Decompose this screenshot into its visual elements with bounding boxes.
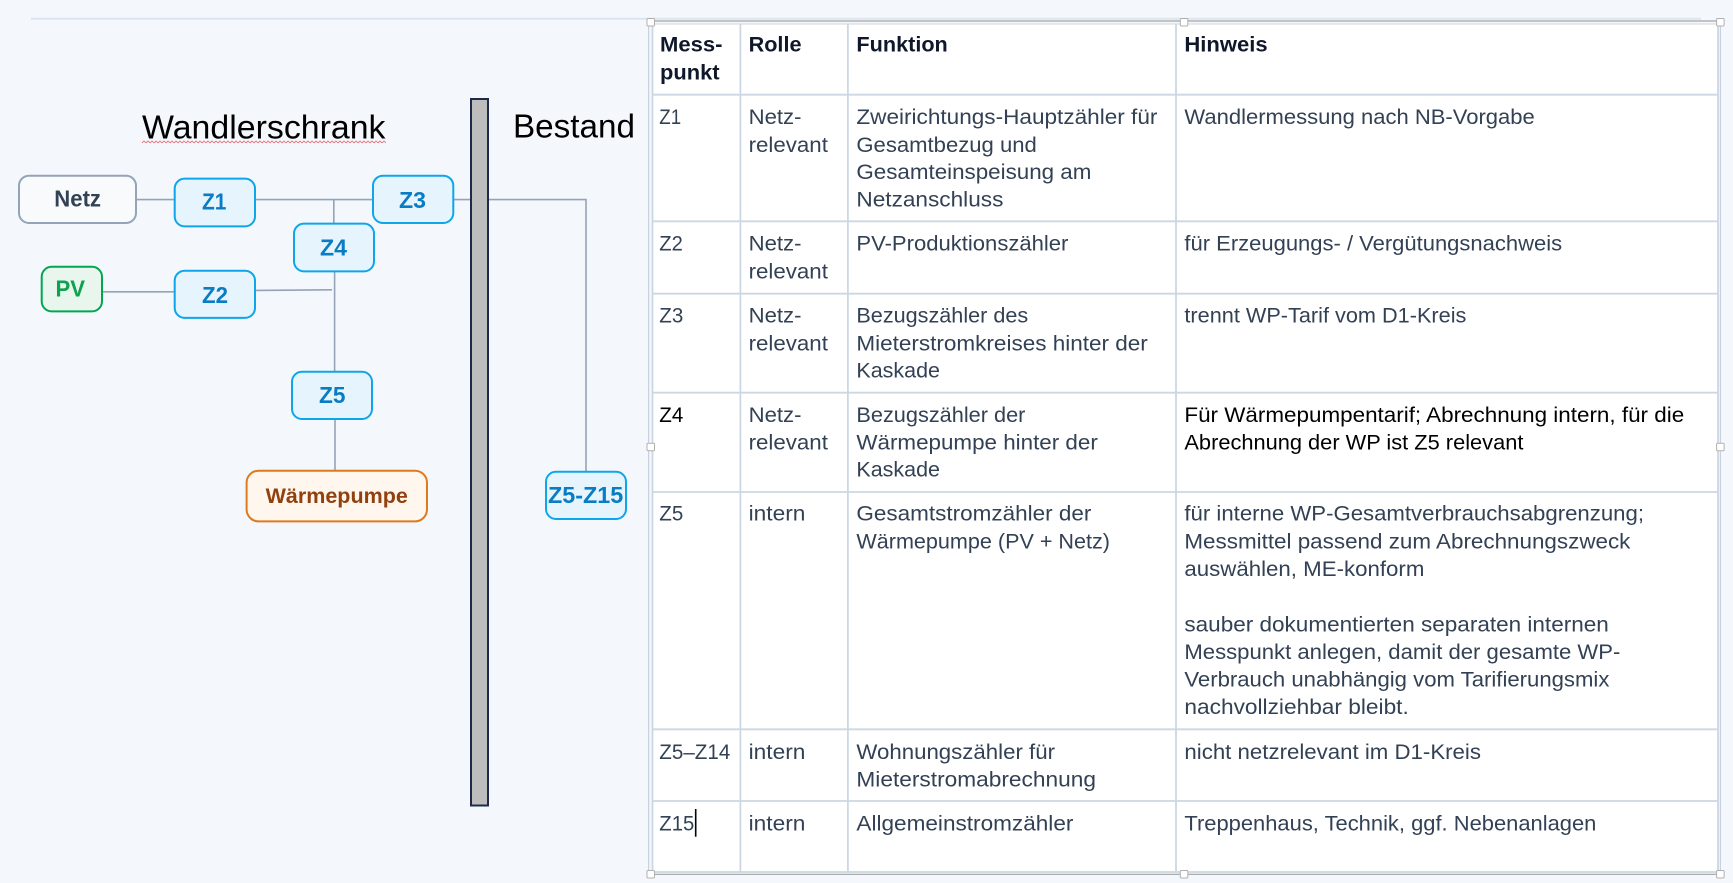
row: Z4: Abrechnung der WP ist Z5 relevant xyxy=(1184,430,1523,454)
row: Z15: Z15 xyxy=(659,812,694,836)
meter: Z1 xyxy=(175,179,255,226)
heading: Bestand: Bestand xyxy=(513,108,635,144)
node: PV xyxy=(42,267,102,311)
row: Z1: Z1 xyxy=(659,105,681,129)
header: Messpunkt: Mess- xyxy=(660,33,722,57)
row: Z15 xyxy=(659,809,1596,837)
meter: Z1: Z1 xyxy=(202,189,226,215)
row: Z3: relevant xyxy=(749,332,828,356)
row: Z2: für Erzeugungs- / Vergütungsnachweis xyxy=(1184,232,1562,256)
row: Z1: Gesamtbezug und xyxy=(856,133,1037,157)
row: Z5: Gesamtstromzähler der xyxy=(856,502,1091,526)
meter: Z3 xyxy=(373,176,453,223)
row: Z5: Messpunkt anlegen, damit der gesamte WP- xyxy=(1184,640,1620,664)
row: Z4 xyxy=(659,403,1684,482)
row: Z5: intern xyxy=(749,502,805,526)
row: Z5: Messmittel passend zum Abrechnungszweck xyxy=(1184,530,1631,554)
meter: Z4 xyxy=(294,224,374,271)
row: Z3: Mieterstromkreises hinter der xyxy=(856,332,1148,356)
header: Messpunkt xyxy=(660,33,722,85)
heading: Wandlerschrank: Wandlerschrank xyxy=(142,109,386,146)
row: Z5–Z14: nicht netzrelevant im D1-Kreis xyxy=(1184,740,1481,764)
row: Z15: Treppenhaus, Technik, ggf. Nebenanlagen xyxy=(1184,812,1596,836)
row: Z5 xyxy=(659,502,1644,719)
header: Messpunkt: punkt xyxy=(660,61,720,85)
row: Z5: nachvollziehbar bleibt. xyxy=(1184,695,1409,719)
meter: Z2 xyxy=(175,271,255,318)
meter: Z5-Z15 xyxy=(546,472,626,519)
node: Netz: Netz xyxy=(54,186,101,212)
row: Z15: intern xyxy=(749,812,805,836)
row: Z4: Netz- xyxy=(749,403,802,427)
row: Z15: Allgemeinstromzähler xyxy=(856,812,1073,836)
row: Z5: auswählen, ME-konform xyxy=(1184,557,1424,581)
row: Z1: Gesamteinspeisung am xyxy=(856,160,1091,184)
row: Z5–Z14: intern xyxy=(749,740,805,764)
row: Z2: PV-Produktionszähler xyxy=(856,232,1068,256)
row: Z3: trennt WP-Tarif vom D1-Kreis xyxy=(1184,304,1466,328)
row: Z5–Z14: Wohnungszähler für xyxy=(856,740,1055,764)
meter: Z5 xyxy=(292,372,372,419)
row: Z1: Netzanschluss xyxy=(856,188,1003,212)
header: Hinweis: Hinweis xyxy=(1184,33,1268,57)
row: Z5: Z5 xyxy=(659,502,683,526)
row: Z4: Für Wärmepumpentarif; Abrechnung intern, für die xyxy=(1184,403,1684,427)
row: Z4: Bezugszähler der xyxy=(856,403,1025,427)
row: Z5–Z14 xyxy=(659,740,1481,792)
node: Netz xyxy=(19,176,136,223)
table grid xyxy=(652,24,1718,872)
node: Wärmepumpe: Wärmepumpe xyxy=(266,485,408,508)
row: Z3 xyxy=(659,304,1466,383)
node: PV: PV xyxy=(56,276,86,302)
header: Rolle: Rolle xyxy=(749,33,802,57)
row: Z3: Z3 xyxy=(659,304,683,328)
row: Z3: Kaskade xyxy=(856,359,940,383)
row: Z1: relevant xyxy=(749,133,828,157)
row: Z3: Netz- xyxy=(749,304,802,328)
meter: Z2: Z2 xyxy=(202,282,228,308)
row: Z4: relevant xyxy=(749,430,828,454)
row: Z5–Z14: Z5–Z14 xyxy=(659,740,730,764)
row: Z5: Verbrauch unabhängig vom Tarifierungsmix xyxy=(1184,668,1610,692)
row: Z2: Netz- xyxy=(749,232,802,256)
row: Z1 xyxy=(659,105,1535,212)
row: Z5: Wärmepumpe (PV + Netz) xyxy=(856,530,1110,554)
meter: Z5: Z5 xyxy=(319,382,346,408)
panel: meter table xyxy=(647,18,1724,878)
row: Z2 xyxy=(659,232,1562,284)
row: Z4: Wärmepumpe hinter der xyxy=(856,430,1098,454)
header: Funktion: Funktion xyxy=(856,33,948,57)
row: Z2: Z2 xyxy=(659,232,683,256)
row: Z1: Zweirichtungs-Hauptzähler für xyxy=(856,105,1157,129)
row: Z5–Z14: Mieterstromabrechnung xyxy=(856,768,1096,792)
row: Z3: Bezugszähler des xyxy=(856,304,1028,328)
selection frame xyxy=(647,18,1724,878)
meter: Z5-Z15: Z5-Z15 xyxy=(548,482,623,508)
node: Wärmepumpe xyxy=(247,471,427,521)
panel: metering diagram xyxy=(19,99,635,806)
row: Z5: sauber dokumentierten separaten internen xyxy=(1184,613,1609,637)
busbar separating Wandlerschrank and Bestand xyxy=(471,99,488,806)
table background xyxy=(652,24,1718,872)
meter: Z3: Z3 xyxy=(399,187,426,213)
meter: Z4: Z4 xyxy=(320,235,347,261)
table header row xyxy=(660,33,1268,85)
row: Z4: Z4 xyxy=(659,403,683,427)
connection lines xyxy=(102,200,586,472)
row: Z2: relevant xyxy=(749,260,828,284)
row: Z1: Netz- xyxy=(749,105,802,129)
row: Z1: Wandlermessung nach NB-Vorgabe xyxy=(1184,105,1535,129)
row: Z5: für interne WP-Gesamtverbrauchsabgrenzung; xyxy=(1184,502,1644,526)
row: Z4: Kaskade xyxy=(856,458,940,482)
